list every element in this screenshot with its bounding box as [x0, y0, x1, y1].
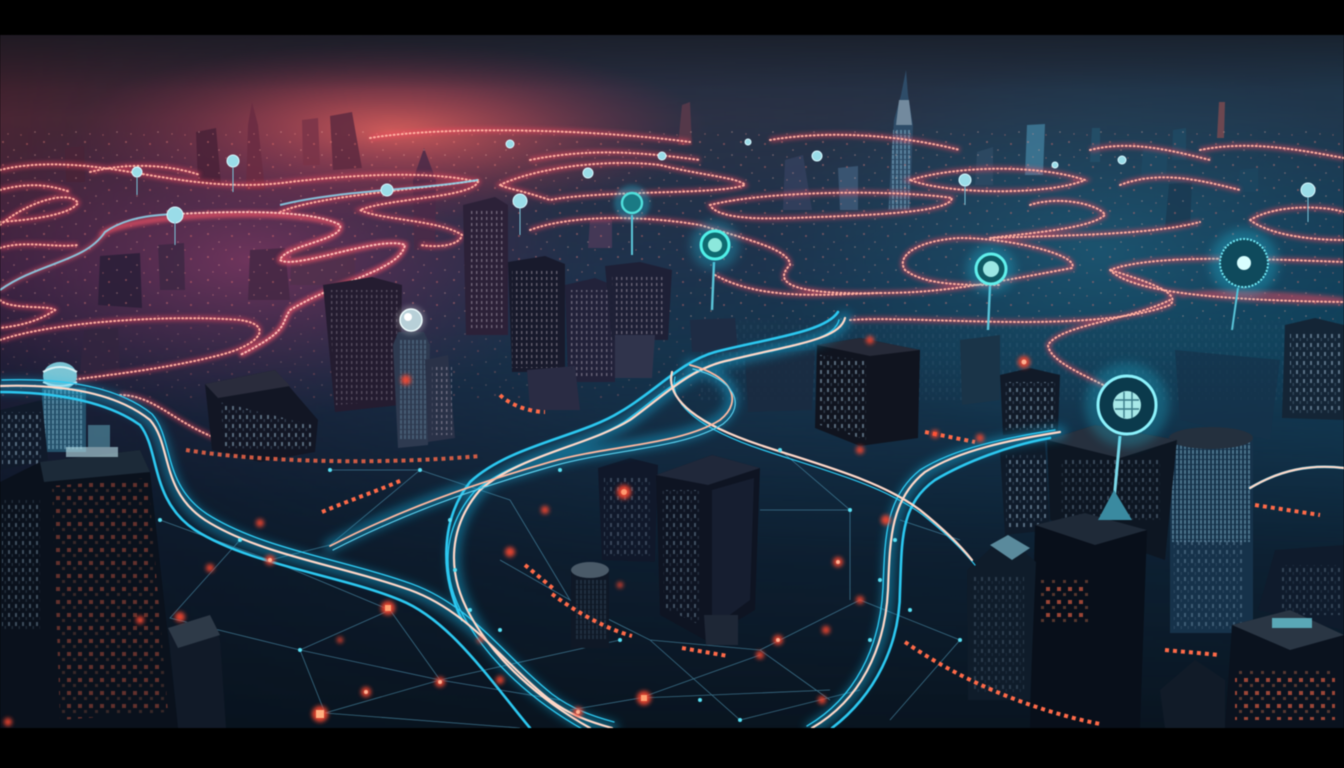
building: short cylinder — [571, 562, 609, 648]
orange dashed light trails — [186, 395, 1320, 724]
distant skyline towers — [65, 102, 1258, 372]
network mesh lines on the ground — [160, 450, 960, 728]
building: tower with glass sphere — [393, 332, 455, 448]
building: wide block centre right — [815, 338, 920, 446]
building: small foreground block — [168, 615, 226, 728]
glowing main data streams — [0, 312, 1344, 730]
ring bright dotted lights — [0, 130, 1344, 450]
beacon: radiant node right — [1210, 229, 1278, 330]
mid-ground buildings — [0, 197, 1344, 470]
red network nodes — [4, 336, 1030, 726]
building: domed cylinder left — [0, 362, 86, 470]
beacon: large target node — [1085, 363, 1169, 520]
ambient city texture: scattered lights — [0, 130, 1344, 400]
building: right cluster tops — [967, 425, 1177, 728]
stream secondary — [330, 365, 735, 550]
beacon: ring node 991,269 — [967, 245, 1015, 330]
cyan network dots — [158, 448, 962, 722]
building: large left tower — [0, 425, 178, 728]
building: glass cylinder right — [1169, 427, 1253, 633]
stream cyan lines — [0, 312, 1344, 730]
building: dark block left of centre — [323, 277, 402, 412]
upper left cyan ring — [0, 180, 478, 355]
building: right mid blocks — [690, 318, 1344, 440]
beacon: glass sphere — [396, 305, 426, 335]
spire tower — [888, 70, 913, 210]
stream warm lines — [0, 318, 1344, 728]
beacon: ring node 715,245 — [691, 221, 739, 310]
ring glow underlay — [0, 130, 1344, 450]
beacons: small distant nodes — [132, 139, 1315, 245]
building: bottom right towers — [1160, 545, 1344, 728]
building: mid tower row — [463, 197, 672, 410]
beacon: ring node 632,203 — [614, 185, 650, 255]
building: twin centre towers — [598, 455, 760, 645]
horizon rings of pink-orange light — [0, 130, 1344, 450]
building: low block — [205, 370, 318, 462]
stream glow — [0, 318, 1060, 728]
foreground buildings — [0, 425, 1344, 728]
